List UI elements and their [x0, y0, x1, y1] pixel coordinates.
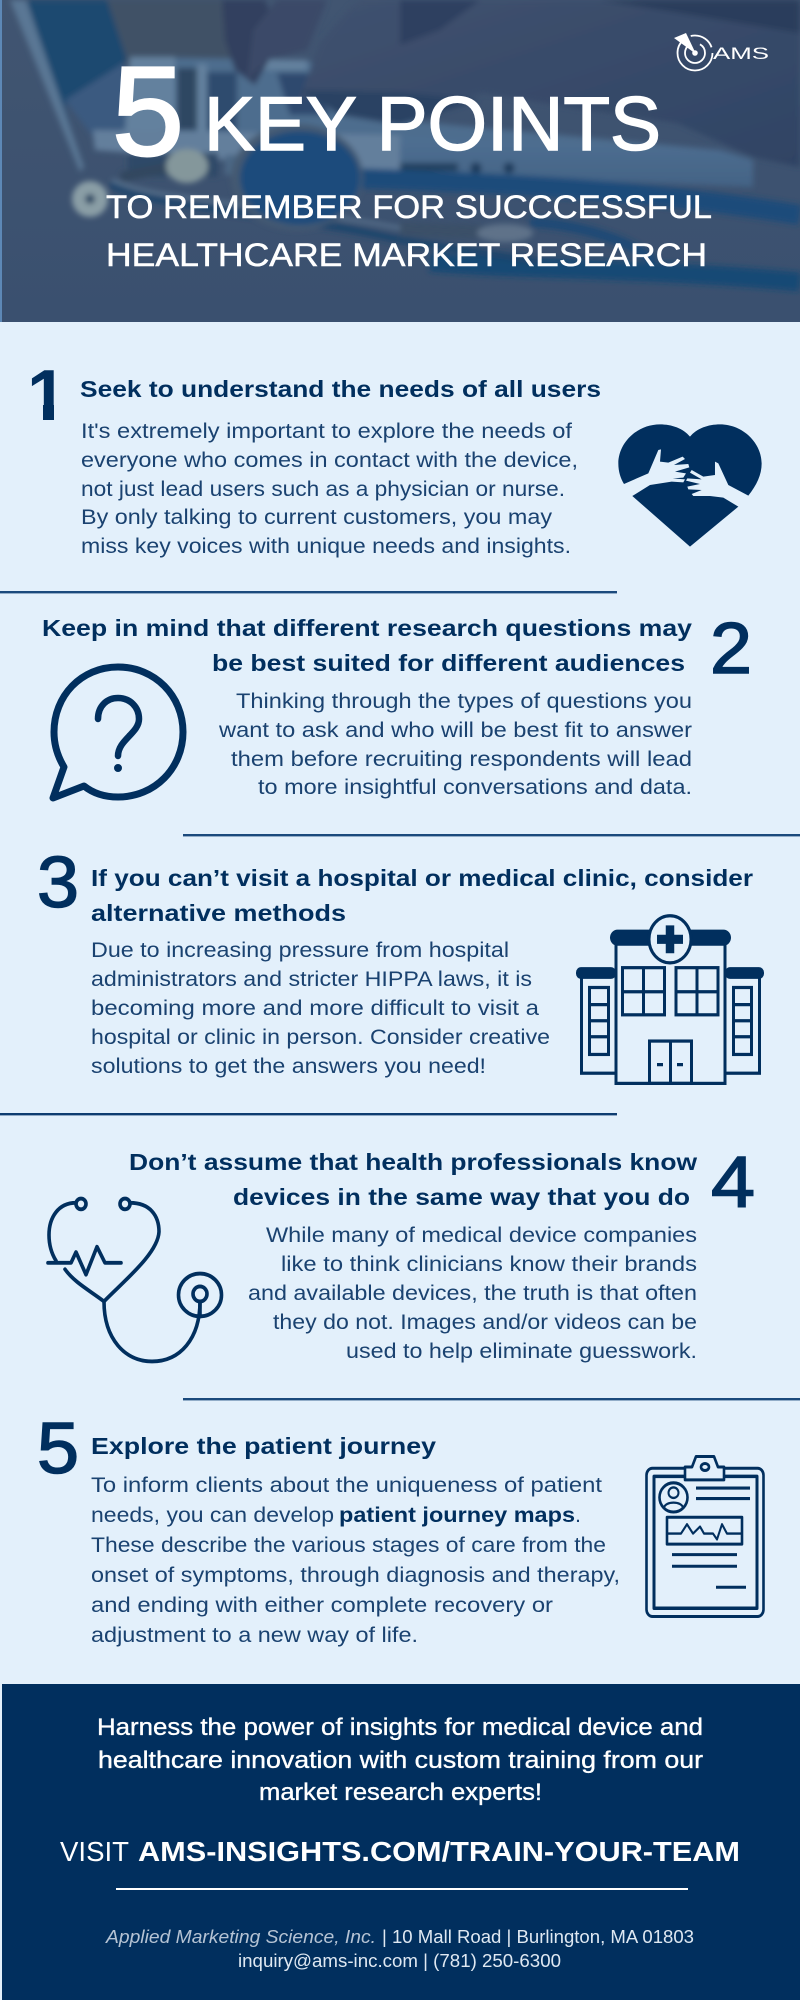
call to action text: [97, 1714, 703, 1806]
body 2: [218, 689, 692, 799]
body 1: It's extremely important to explore the needs of: [81, 419, 572, 443]
icon: heart with hands: [618, 424, 762, 547]
panel: point 5: [37, 1409, 764, 1647]
number 1: 1: [27, 356, 67, 436]
icon: clipboard: [646, 1457, 764, 1616]
body 4: like to think clinicians know their brands: [281, 1252, 697, 1276]
body 1: everyone who comes in contact with the device,: [81, 448, 578, 472]
body 5: onset of symptoms, through diagnosis and therapy,: [91, 1563, 620, 1587]
title: 5: [112, 40, 184, 182]
body 5: adjustment to a new way of life.: [91, 1623, 418, 1647]
body 4: used to help eliminate guesswork.: [346, 1339, 697, 1363]
heading 3: alternative methods: [91, 900, 346, 926]
body 1: miss key voices with unique needs and insights.: [81, 534, 571, 558]
body 5: and ending with either complete recovery or: [91, 1593, 553, 1617]
logo mark: [674, 33, 712, 70]
heading 4: Don’t assume that health professionals know: [129, 1149, 698, 1175]
body 3: administrators and stricter HIPPA laws, it is: [91, 967, 532, 991]
body 1: By only talking to current customers, you may: [81, 505, 552, 529]
panel: footer call to action: [2, 1684, 800, 2000]
heading 4: devices in the same way that you do: [233, 1184, 690, 1210]
body 4: they do not. Images and/or videos can be: [273, 1310, 697, 1334]
panel: point 1: [27, 356, 762, 558]
body 4: [248, 1223, 697, 1363]
icon: question speech bubble: [53, 667, 183, 798]
body 2: them before recruiting respondents will lead: [231, 747, 692, 771]
title: HEALTHCARE MARKET RESEARCH: [106, 237, 707, 273]
panel: point 4: [48, 1143, 755, 1363]
header photo: laptop and stethoscope: [0, 0, 800, 322]
icon: hospital: [576, 916, 764, 1083]
body 3: hospital or clinic in person. Consider creative: [91, 1025, 550, 1049]
heading 3: If you can’t visit a hospital or medical clinic, consider: [91, 865, 753, 891]
website link: VISIT: [60, 1836, 129, 1867]
title: [106, 40, 712, 273]
title: KEY POINTS: [204, 82, 661, 167]
call to action text: market research experts!: [259, 1779, 542, 1806]
heading 4: [129, 1149, 698, 1210]
contact details: inquiry@ams-inc.com | (781) 250-6300: [238, 1951, 561, 1971]
number 2: 2: [710, 609, 752, 689]
heading 5: Explore the patient journey: [91, 1433, 436, 1459]
heading 2: [42, 615, 692, 676]
panel: point 3: [37, 843, 764, 1083]
contact details: | 10 Mall Road | Burlington, MA 01803: [382, 1927, 694, 1947]
logo: AMS: AMS: [713, 44, 769, 63]
body 3: Due to increasing pressure from hospital: [91, 938, 509, 962]
body 3: [91, 938, 550, 1078]
panel: point 2: [42, 609, 752, 799]
body 3: becoming more and more difficult to visit a: [91, 996, 539, 1020]
body 5: needs, you can develop: [91, 1503, 334, 1527]
body 4: and available devices, the truth is that often: [248, 1281, 697, 1305]
contact details: [105, 1927, 694, 1971]
number 3: 3: [37, 843, 79, 923]
body 5: .: [575, 1503, 581, 1527]
body 2: to more insightful conversations and data.: [258, 775, 692, 799]
number 4: 4: [711, 1143, 755, 1223]
body 5: patient journey maps: [339, 1503, 575, 1527]
number 1: [32, 370, 54, 420]
body 3: solutions to get the answers you need!: [91, 1054, 486, 1078]
icon: stethoscope: [48, 1199, 222, 1361]
body 1: not just lead users such as a physician or nurse.: [81, 477, 565, 501]
body 2: want to ask and who will be best fit to answer: [218, 718, 692, 742]
call to action text: healthcare innovation with custom training from our: [98, 1747, 703, 1774]
body 5: To inform clients about the uniqueness of patient: [91, 1473, 602, 1497]
heading 1: Seek to understand the needs of all users: [80, 376, 601, 402]
website link: AMS-INSIGHTS.COM/TRAIN-YOUR-TEAM: [138, 1836, 740, 1867]
body 4: While many of medical device companies: [266, 1223, 697, 1247]
logo: AMS: [674, 33, 769, 70]
call to action text: Harness the power of insights for medical device and: [97, 1714, 703, 1741]
body 5: These describe the various stages of care from the: [91, 1533, 606, 1557]
heading 2: be best suited for different audiences: [212, 650, 685, 676]
body 1: [81, 419, 578, 558]
body 5: [91, 1473, 620, 1647]
title: TO REMEMBER FOR SUCCCESSFUL: [106, 189, 712, 225]
body 2: Thinking through the types of questions you: [236, 689, 692, 713]
contact details: Applied Marketing Science, Inc.: [105, 1927, 376, 1947]
heading 2: Keep in mind that different research questions may: [42, 615, 692, 641]
number 5: 5: [37, 1409, 79, 1489]
header banner: [0, 0, 800, 322]
heading 3: [91, 865, 753, 926]
